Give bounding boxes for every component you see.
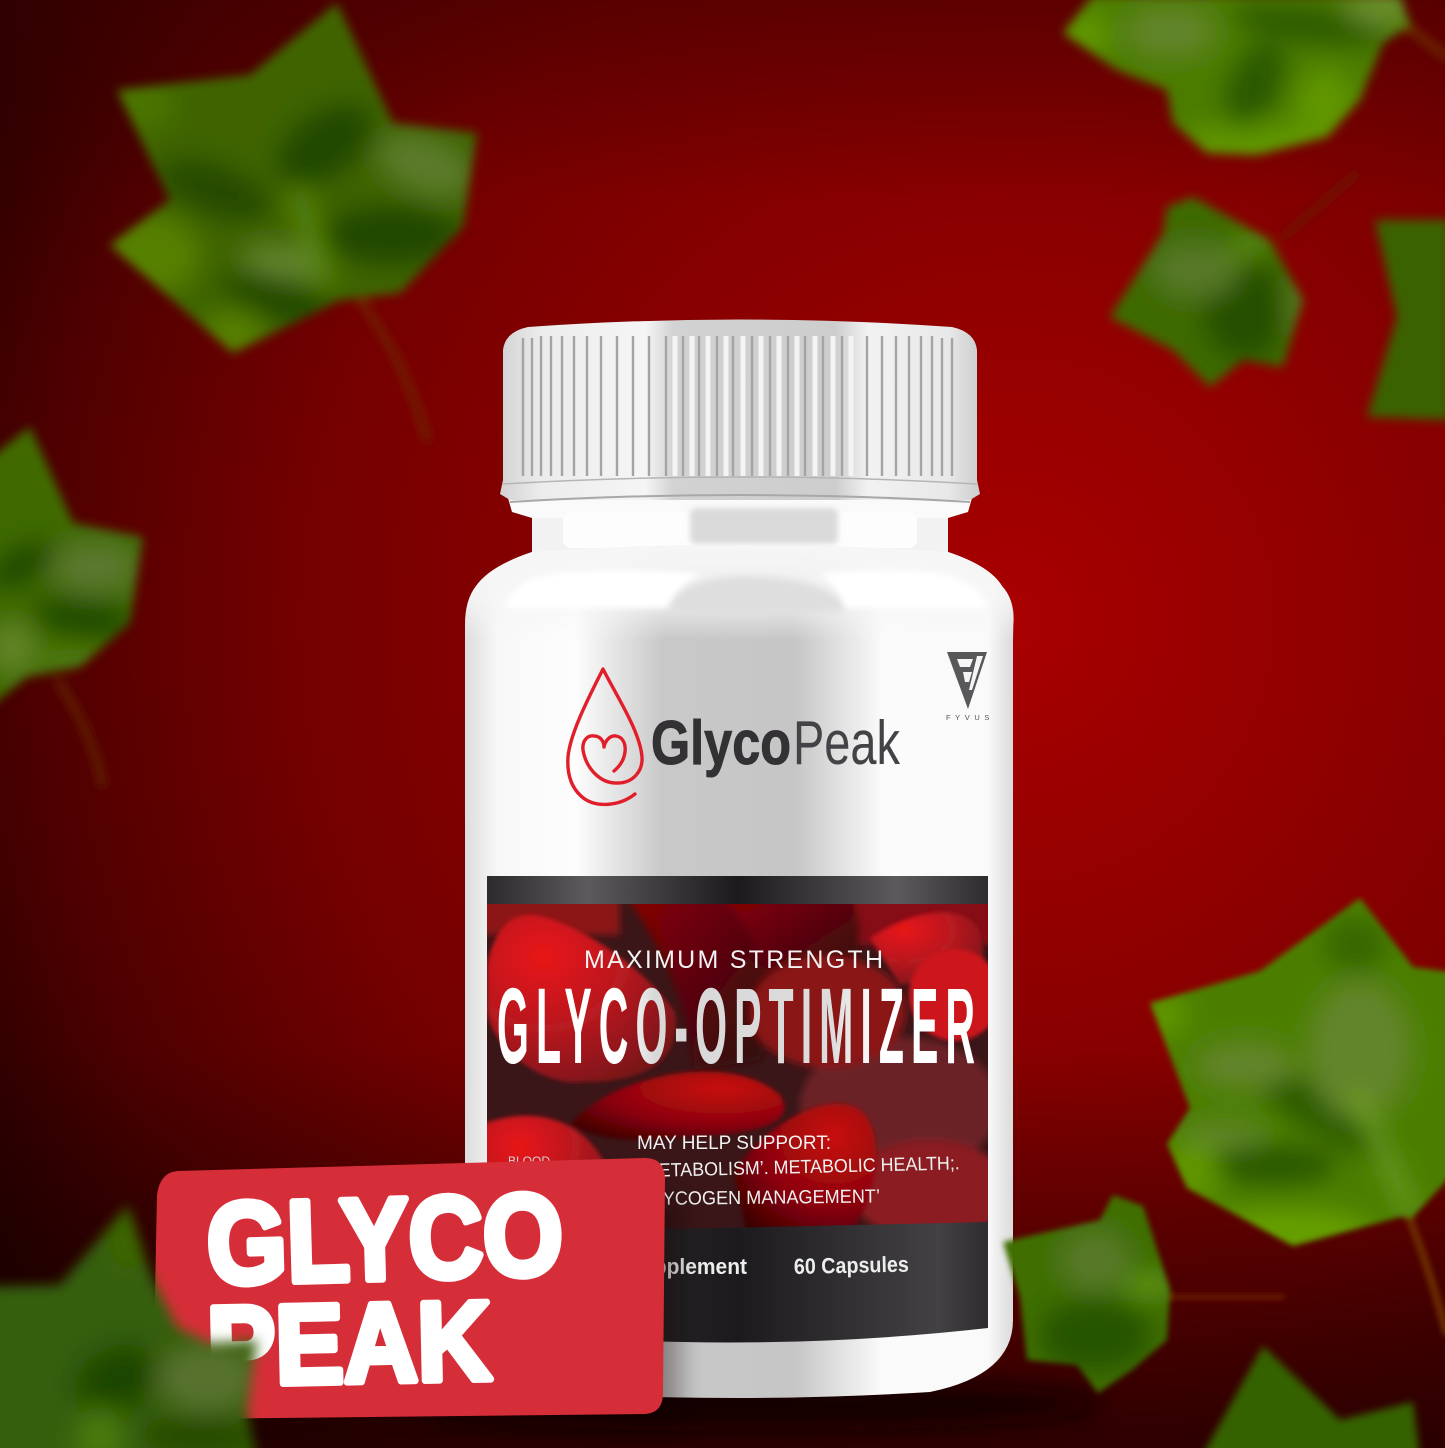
icon: blood drop with heart <box>568 669 642 804</box>
label: red blood cell panel <box>487 904 988 1229</box>
leaf: upper right <box>1110 172 1358 387</box>
leaf: large top left <box>95 3 482 442</box>
supplement label: Supplement <box>627 1254 748 1279</box>
support line two: METABOLISM’. METABOLIC HEALTH;. <box>644 1153 960 1182</box>
brand: Glyco: Glyco <box>651 709 791 778</box>
card title: glyco: GLYCO <box>205 1169 565 1309</box>
card shape <box>153 1158 665 1419</box>
maker name: FYVUS <box>946 713 994 722</box>
bottle body <box>465 545 1013 1398</box>
card shadow <box>200 1200 680 1430</box>
label: dark top band <box>487 876 988 904</box>
leaf: bottom right <box>1200 1346 1420 1448</box>
capsule count: 60 Capsules <box>794 1252 909 1279</box>
label: dark bottom band <box>487 1222 988 1343</box>
brand name <box>651 709 901 778</box>
leaf: left edge <box>0 427 143 787</box>
bottle shadow <box>420 1379 1100 1431</box>
support line three: GLYCOGEN MANAGEMENT’ <box>640 1186 880 1210</box>
support heading: MAY HELP SUPPORT: <box>637 1133 831 1154</box>
maker logo <box>946 652 994 722</box>
bottle neck <box>508 495 972 565</box>
red brand card <box>153 1158 665 1419</box>
product name: GLYCO-OPTIMIZER <box>497 966 975 1087</box>
card title: peak: PEAK <box>206 1278 492 1409</box>
leaf: foreground bottom left <box>0 1205 260 1448</box>
subhead: MAXIMUM STRENGTH <box>584 946 885 974</box>
leaf: large lower right <box>1143 898 1445 1335</box>
leaf: right edge <box>1367 220 1445 420</box>
bottle cap <box>500 320 980 502</box>
brand: Peak: Peak <box>793 709 901 778</box>
leaf: top right <box>1059 0 1445 167</box>
leaf: beside bottle <box>1003 1195 1285 1393</box>
support line one: BLOOD <box>508 1154 550 1168</box>
shoulder <box>465 545 1014 640</box>
bottle <box>465 320 1014 1398</box>
